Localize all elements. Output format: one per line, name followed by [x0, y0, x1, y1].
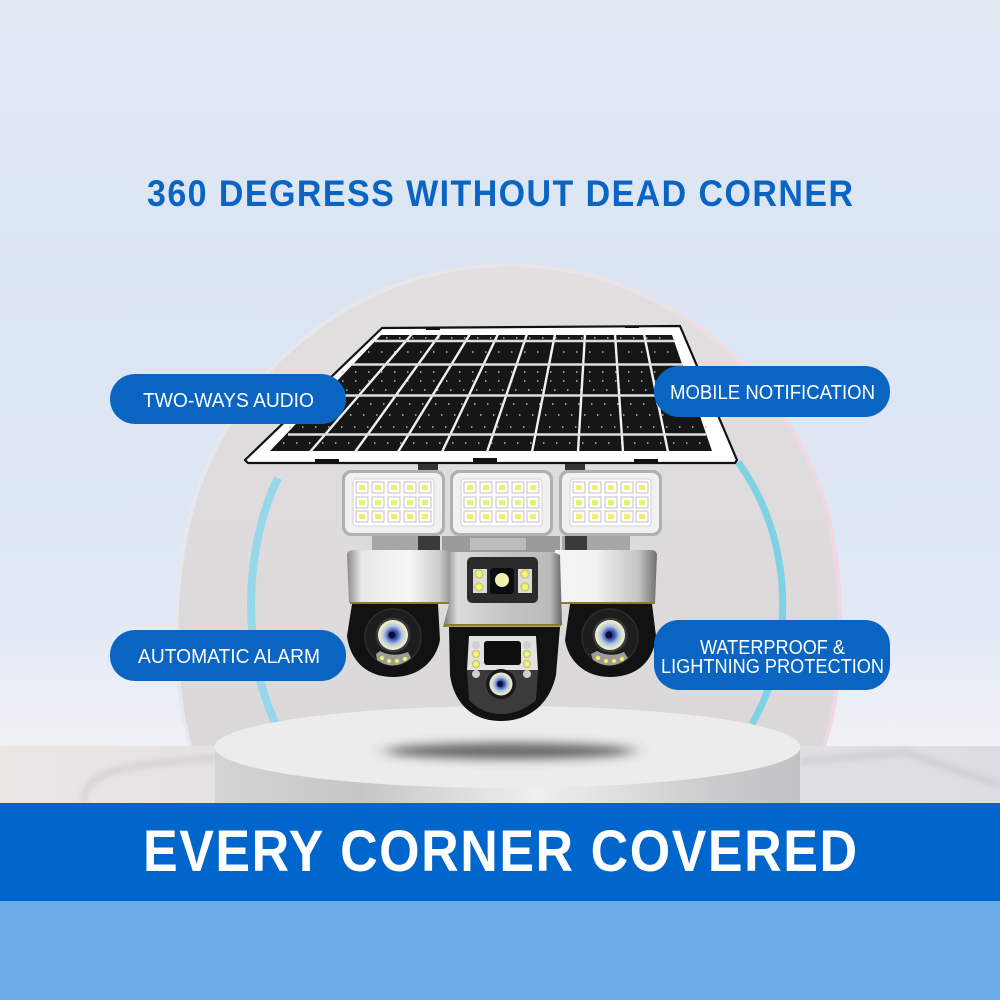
housing: [347, 550, 450, 603]
camera left: [347, 550, 450, 677]
bottom banner: EVERY CORNER COVERED: [143, 818, 857, 884]
bottom light blue strip: [0, 901, 1000, 1000]
teal ring arc left: [251, 478, 278, 724]
dome: [347, 604, 440, 677]
pill: automatic alarm: AUTOMATIC ALARM: [138, 646, 320, 668]
title: 360 DEGRESS WITHOUT DEAD CORNER: [147, 174, 853, 214]
solar cells: [270, 335, 712, 451]
bottom banner: [0, 803, 1000, 901]
pill: two-ways audio: [110, 374, 346, 424]
floodlight right: [559, 470, 662, 536]
pedestal: [214, 706, 800, 803]
lens: [486, 669, 516, 699]
pill: waterproof and lightning protection: WATERPROOF &: [700, 637, 846, 659]
cell dots: [283, 338, 710, 443]
pill: mobile notification: MOBILE NOTIFICATION: [670, 382, 875, 404]
pill: waterproof and lightning protection: LIGHTNING PROTECTION: [661, 656, 884, 678]
floodlight left: [342, 470, 445, 536]
backdrop arch: [175, 263, 842, 746]
marble floor: [0, 746, 1000, 804]
pill: automatic alarm: [110, 630, 346, 681]
front plate: [467, 636, 538, 714]
pedestal shadow: [385, 743, 635, 759]
pill: two-ways audio: TWO-WAYS AUDIO: [143, 390, 314, 412]
pill: mobile notification: [654, 366, 890, 417]
pill: waterproof and lightning protection: [654, 620, 890, 690]
dome: [565, 604, 656, 677]
lens: [582, 609, 638, 665]
camera right: [555, 550, 657, 677]
brackets: [372, 536, 630, 552]
background wall: [0, 0, 1000, 748]
led strip: [376, 651, 411, 666]
teal ring arc right: [738, 462, 783, 724]
solar panel: [245, 326, 737, 470]
cell grid: [288, 334, 706, 452]
housing: [555, 550, 657, 603]
dome: [449, 627, 560, 721]
camera centre: [443, 552, 562, 721]
lens: [365, 609, 421, 665]
housing: [443, 552, 562, 627]
floodlight centre: [450, 470, 553, 536]
led strip: [591, 651, 628, 666]
sensor box: [467, 557, 538, 603]
